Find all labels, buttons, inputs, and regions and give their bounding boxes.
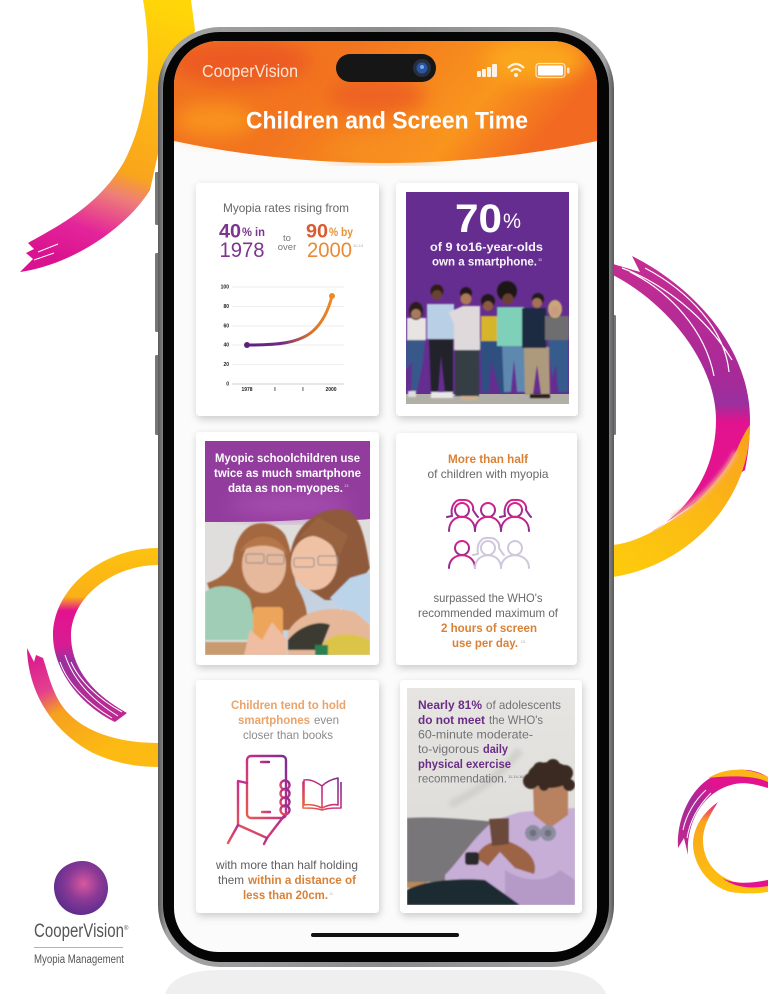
lower sweep <box>27 648 158 767</box>
home indicator <box>311 933 459 937</box>
headphones <box>525 825 556 841</box>
text: bottom: 11 <box>329 891 334 896</box>
brush stroke: bottom right ring <box>678 770 768 893</box>
text block: do not meet <box>418 713 485 727</box>
brush stroke: top left <box>20 0 195 272</box>
person 7 <box>545 300 569 392</box>
stat: 40 percent: % in <box>242 225 265 239</box>
stat: 90 percent: 10-13 <box>353 243 364 248</box>
text: bottom: with more than half holding <box>215 858 358 872</box>
text: bottom: less than 20cm. <box>243 888 328 902</box>
line chart <box>221 284 344 393</box>
line chart: 40 <box>223 342 229 348</box>
line chart: 2000 <box>325 387 337 393</box>
stat: 90 percent: % by <box>329 225 353 239</box>
text block <box>430 240 543 268</box>
header brand name: CooperVision <box>202 61 298 81</box>
panel: myopia rates chart card <box>196 183 379 416</box>
text: top: of children with myopia <box>428 467 549 481</box>
phone side buttons <box>155 172 616 435</box>
stat: 40 percent: 40 <box>219 222 241 242</box>
person 3 <box>449 287 480 400</box>
title: Children and Screen Time <box>246 108 528 134</box>
logo: CooperVision Myopia Management: ® <box>124 925 129 932</box>
icon: group of children <box>447 500 531 568</box>
text: top: even <box>314 713 339 727</box>
trousers <box>407 879 520 905</box>
text block: 13 <box>344 483 349 488</box>
text: top: closer than books <box>243 728 333 742</box>
text: bottom <box>418 591 559 650</box>
connector text <box>278 233 296 253</box>
text block <box>418 698 561 786</box>
logo mark <box>54 861 108 915</box>
line chart: I <box>302 387 304 393</box>
text: top: smartphones <box>238 713 310 727</box>
text: bottom: use per day. <box>452 636 518 650</box>
text block: daily <box>483 742 508 756</box>
text: top <box>231 698 346 742</box>
panel: more than half card <box>396 433 577 665</box>
text block: data as non-myopes. <box>228 481 343 495</box>
brush stroke: left ring <box>27 548 158 767</box>
photo: two girls with a phone <box>205 441 370 655</box>
connector text: over <box>278 242 296 253</box>
text block: to-vigorous <box>418 742 479 756</box>
text block: recommendation. <box>418 772 507 786</box>
curly hair <box>523 759 575 791</box>
text block: the WHO's <box>489 713 543 727</box>
photo: teen on sofa <box>407 688 575 905</box>
icon: hand holding phone <box>228 756 290 844</box>
stat: 70 percent: % <box>503 210 521 233</box>
right girl <box>288 509 370 655</box>
hands and phone <box>476 841 535 874</box>
text: bottom: them <box>218 873 244 887</box>
text block: Myopic schoolchildren use <box>215 451 360 465</box>
stat: 90 percent: 2000 <box>307 239 352 262</box>
screen <box>174 41 597 952</box>
line chart: I <box>274 387 276 393</box>
panel: holding distance card <box>196 680 379 913</box>
text block: of adolescents <box>486 698 561 712</box>
stat: 90 percent: 90 <box>306 222 328 242</box>
head <box>533 785 568 828</box>
connector text: to <box>283 233 291 244</box>
brush stroke: right <box>613 256 750 577</box>
text block: 60-minute moderate- <box>418 728 533 742</box>
photo: teenagers on phones <box>406 192 569 404</box>
text: bottom: surpassed the WHO's <box>434 591 542 605</box>
person 1 <box>406 302 426 397</box>
person 4 <box>480 294 508 393</box>
line chart: 1978 <box>241 387 253 393</box>
heading: Myopia rates rising from <box>223 201 349 215</box>
text block: twice as much smartphone <box>214 466 361 480</box>
text: bottom: within a distance of <box>247 873 357 887</box>
text: top: Children tend to hold <box>231 698 346 712</box>
text: bottom: recommended maximum of <box>418 606 559 620</box>
text block: physical exercise <box>418 757 511 771</box>
text: top: More than half <box>448 452 529 466</box>
text block: of 9 to16-year-olds <box>430 240 543 254</box>
text: bottom <box>215 858 358 902</box>
left girl <box>205 523 307 655</box>
sub-brand: Myopia Management <box>34 954 125 966</box>
phone reflection <box>165 970 606 994</box>
line chart: 60 <box>223 324 229 330</box>
person 2 <box>427 284 454 398</box>
line chart: 0 <box>226 382 229 388</box>
status icons <box>477 64 570 78</box>
hoodie <box>445 808 575 905</box>
panel: physical exercise card <box>400 680 582 913</box>
stat: 40 percent <box>219 222 265 262</box>
line chart: 80 <box>223 304 229 310</box>
phone body <box>158 27 614 967</box>
text: top <box>428 452 549 481</box>
line chart: 100 <box>221 284 229 290</box>
brand name: CooperVision <box>34 921 124 942</box>
panel: smartphone data card <box>196 432 379 665</box>
text block: 11,14-16 <box>508 774 524 779</box>
panel: smartphone ownership card <box>396 183 578 416</box>
text block <box>214 451 361 495</box>
dynamic island with camera <box>336 54 436 82</box>
phone in hand <box>244 607 287 655</box>
logo: CooperVision Myopia Management <box>34 861 129 966</box>
text block: own a smartphone. <box>432 254 537 268</box>
line chart: 20 <box>223 362 229 368</box>
stat: 90 percent <box>306 222 364 262</box>
header banner <box>170 40 597 163</box>
stat: 70 percent <box>455 197 521 241</box>
purple watercolour band <box>205 441 370 522</box>
text block: Nearly 81% <box>418 698 482 712</box>
person 5 <box>497 281 526 392</box>
person 6 <box>522 293 550 398</box>
sofa <box>407 817 500 882</box>
stat: 40 percent: 1978 <box>220 239 264 262</box>
icon: open book <box>303 778 341 810</box>
text block: 11 <box>538 257 543 262</box>
text: bottom: 13 <box>521 639 526 644</box>
text: bottom: 2 hours of screen <box>441 621 537 635</box>
stat: 70 percent: 70 <box>455 197 502 241</box>
